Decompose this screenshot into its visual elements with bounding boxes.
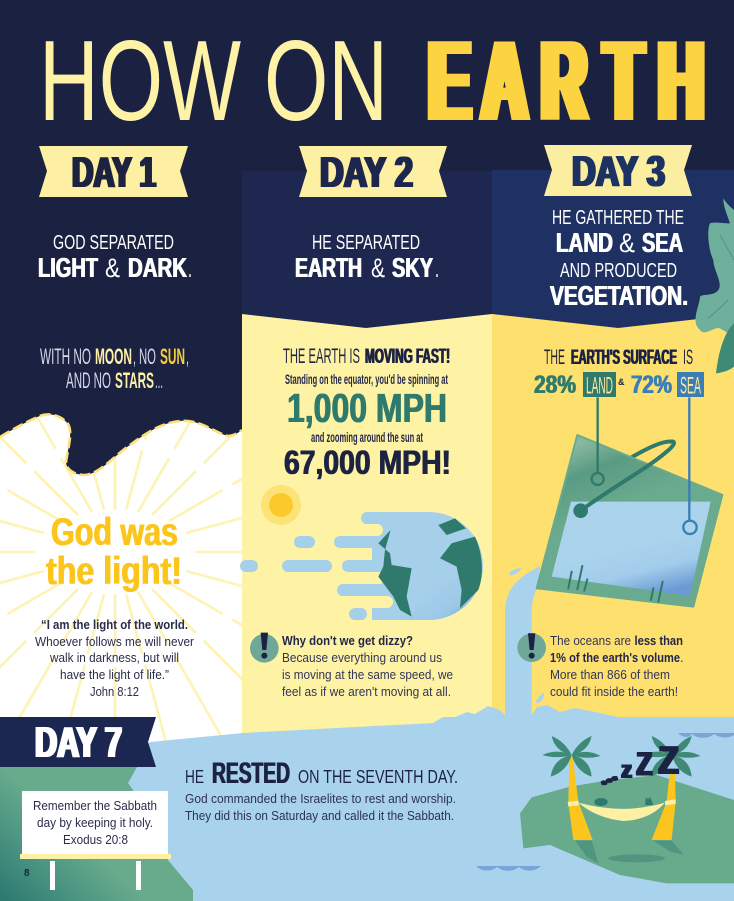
no moon text: SUN <box>160 344 185 369</box>
day 1 heading: . <box>188 253 192 283</box>
water pouring <box>505 566 544 723</box>
day 3 heading: LAND <box>556 227 613 258</box>
right palm <box>642 736 701 840</box>
icon: exclamation <box>517 633 546 662</box>
icon: exclamation <box>250 633 279 663</box>
day 2 heading: & <box>371 253 385 283</box>
day 1 heading <box>38 232 192 283</box>
bible quote john 8:12: walk in darkness, but will <box>49 650 179 665</box>
day 3 heading: VEGETATION. <box>550 280 688 311</box>
day 2 heading: EARTH <box>295 252 362 283</box>
day 2 fast facts <box>283 345 451 482</box>
day 1 heading: GOD SEPARATED <box>53 232 174 254</box>
no moon text: AND NO <box>66 368 111 393</box>
billboard posts <box>50 861 141 890</box>
title: HOW ON <box>39 17 388 145</box>
sabbath text: ON THE SEVENTH DAY. <box>298 766 458 787</box>
callout: oceans volume: 1% of the earth's volume <box>550 650 680 665</box>
sabbath text: They did this on Saturday and called it the Sabbath. <box>185 809 454 823</box>
snoring text: Z <box>637 746 652 782</box>
stat: 28% land <box>534 371 616 400</box>
day 1 heading: LIGHT <box>38 252 98 283</box>
infographic: how on earth: SEA <box>680 372 701 400</box>
speed: 1,000 mph: 1,000 MPH <box>287 385 447 431</box>
day 3 surface facts: IS <box>683 346 693 369</box>
sun rays <box>0 416 242 741</box>
sea pointer <box>683 397 697 534</box>
day 2 fast facts: MOVING FAST! <box>365 345 450 368</box>
bible quote john 8:12: “I am the light of the world. <box>41 617 188 632</box>
day 3 heading: SEA <box>642 227 683 258</box>
no moon text: , <box>133 344 136 369</box>
day 1 heading: & <box>105 253 120 283</box>
god was the light <box>46 511 182 593</box>
god was the light: the light! <box>46 550 182 593</box>
day 2 heading: SKY <box>392 252 433 283</box>
day 1 heading: DARK <box>128 252 187 283</box>
snoring text <box>595 739 679 790</box>
day 2 heading <box>295 232 439 283</box>
callout: why don't we get dizzy <box>250 633 453 699</box>
callout: oceans volume: More than 866 of them <box>550 667 670 682</box>
callout: oceans volume: The oceans are <box>550 633 631 648</box>
day 3 heading <box>550 207 688 311</box>
billboard: Remember the Sabbath <box>33 798 157 813</box>
panel: day 3 yellow <box>492 314 734 750</box>
day 3 surface facts <box>534 346 704 400</box>
day 3 ribbon: DAY 3 <box>572 147 665 196</box>
title: EARTH <box>428 16 704 145</box>
panel: land with billboard <box>0 767 193 901</box>
day 3 surface facts: THE <box>544 346 565 369</box>
panel: day 2 yellow <box>242 314 494 750</box>
day 3 heading: & <box>619 228 635 258</box>
infographic: how on earth: , <box>186 344 189 369</box>
panel: day 1 light <box>0 413 243 744</box>
panel: day 3 sky <box>492 170 734 330</box>
no moon text: NO <box>139 344 156 369</box>
no moon text: STARS <box>115 368 154 393</box>
callout: why don't we get dizzy: feel as if we aren't moving at all. <box>282 684 451 699</box>
hammock <box>568 799 676 821</box>
day 2 fast facts: THE EARTH IS <box>283 345 360 368</box>
small waves <box>476 733 734 871</box>
page number: 8 <box>24 868 30 879</box>
callout: oceans volume: could fit inside the earth! <box>550 684 678 699</box>
icon: tropical leaves <box>696 198 734 373</box>
stat: 72% sea <box>631 371 704 400</box>
land pointer <box>592 397 604 485</box>
god was the light: God was <box>51 511 178 554</box>
handle <box>581 442 674 511</box>
speed: 67,000 mph: 67,000 MPH! <box>284 444 451 482</box>
stat: 28% land: 28% <box>534 371 576 399</box>
billboard: day by keeping it holy. <box>37 815 153 830</box>
white light area <box>0 414 242 750</box>
bible quote john 8:12: have the light of life.” <box>60 667 169 682</box>
sleeper <box>594 797 653 806</box>
day 2 fast facts: and zooming around the sun at <box>311 430 423 445</box>
snoring text: ... <box>595 761 620 790</box>
no moon text: MOON <box>95 344 132 369</box>
stat: 72% sea: 72% <box>631 371 672 399</box>
left palm <box>542 736 601 840</box>
callout: oceans volume: . <box>680 650 684 665</box>
bible quote john 8:12: Whoever follows me will never <box>35 634 195 649</box>
no moon text: WITH NO <box>40 344 91 369</box>
callout: why don't we get dizzy: Why don't we get dizzy? <box>282 633 413 648</box>
panel: day 2 sky <box>242 171 492 331</box>
callout: why don't we get dizzy: Because everything around us <box>282 650 442 665</box>
billboard: Exodus 20:8 <box>63 832 128 847</box>
day 7 ribbon: DAY 7 <box>35 718 122 767</box>
day 3 surface facts: LAND <box>586 372 613 400</box>
sabbath text <box>185 757 458 823</box>
day 2 heading: HE SEPARATED <box>312 232 420 254</box>
day 2 heading: . <box>435 253 439 283</box>
dashed light edge <box>0 414 242 475</box>
illustration: hammock island <box>520 736 734 883</box>
icon: sun <box>261 485 301 525</box>
sabbath text: HE <box>185 766 204 787</box>
island shadows <box>575 841 684 863</box>
day 3 heading: AND PRODUCED <box>560 260 677 282</box>
sabbath text: God commanded the Israelites to rest and worship. <box>185 792 456 806</box>
bible quote john 8:12: John 8:12 <box>90 684 139 699</box>
bucket water <box>552 502 711 596</box>
icon: tipped bucket <box>537 397 722 607</box>
panel: sea <box>115 705 734 901</box>
sabbath text: RESTED <box>212 757 290 790</box>
day 1 ribbon: DAY 1 <box>72 148 156 197</box>
callout: oceans volume: less than <box>634 633 683 648</box>
day 3 surface facts: & <box>618 377 625 387</box>
day 2 fast facts: Standing on the equator, you'd be spinning at <box>285 372 448 387</box>
no moon text: ... <box>155 368 163 393</box>
no moon text <box>40 344 189 393</box>
snoring text: z <box>622 756 632 782</box>
bible quote john 8:12 <box>35 617 195 699</box>
day 2 ribbon: DAY 2 <box>320 148 413 197</box>
billboard <box>20 791 171 859</box>
callout: why don't we get dizzy: is moving at the same speed, we <box>282 667 453 682</box>
snoring text: Z <box>659 739 679 782</box>
icon: speeding earth <box>240 512 483 620</box>
callout: oceans volume <box>517 633 684 699</box>
